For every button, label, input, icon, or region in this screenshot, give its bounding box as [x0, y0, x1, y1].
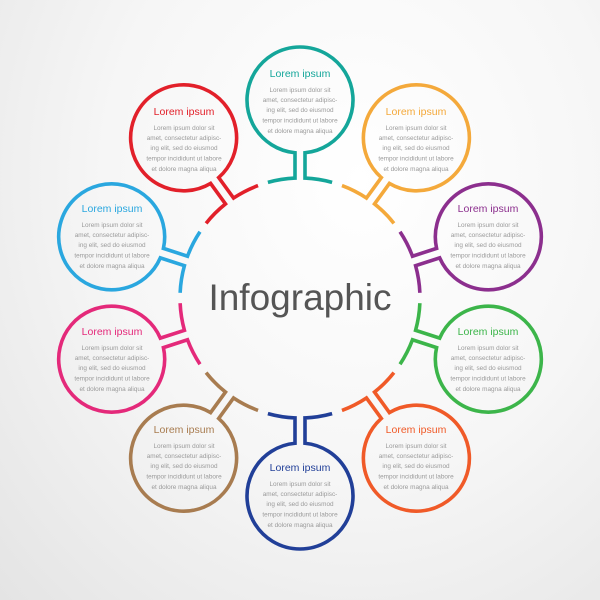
item: green: Lorem ipsum dolor sit	[457, 345, 519, 352]
item: red: Lorem ipsum	[154, 106, 215, 118]
item: blue: tempor incididunt ut labore	[74, 252, 150, 260]
item: green: tempor incididunt ut labore	[450, 376, 526, 382]
item: orange-red: et dolore magna aliqua	[383, 484, 449, 491]
item: green: ing elit, sed do eiusmod	[454, 365, 522, 372]
item: red: Lorem ipsum dolor sit	[153, 125, 215, 132]
item: orange: ing elit, sed do eiusmod	[382, 145, 450, 152]
item: brown: ing elit, sed do eiusmod	[150, 463, 218, 470]
item: blue: ing elit, sed do eiusmod	[78, 242, 146, 249]
item: orange-red	[325, 360, 490, 532]
item: purple: Lorem ipsum dolor sit	[457, 222, 519, 229]
item: blue: Lorem ipsum dolor sit	[81, 222, 143, 229]
item: brown: tempor incididunt ut labore	[146, 474, 222, 480]
item: orange-red: Lorem ipsum dolor sit	[385, 443, 447, 450]
item: red: et dolore magna aliqua	[151, 166, 217, 173]
item: blue: Lorem ipsum	[82, 203, 143, 215]
item: purple: amet, consectetur adipisc-	[451, 232, 525, 239]
item: blue: amet, consectetur adipisc-	[75, 232, 149, 239]
item: teal	[247, 47, 353, 182]
item: navy: ing elit, sed do eiusmod	[266, 501, 334, 508]
item: orange-red: tempor incididunt ut labore	[378, 474, 454, 480]
item: orange: Lorem ipsum	[386, 106, 447, 118]
item: red: tempor incididunt ut labore	[146, 156, 222, 162]
item: green: Lorem ipsum	[458, 326, 519, 338]
title: Infographic	[208, 277, 392, 318]
item: teal: ing elit, sed do eiusmod	[266, 107, 334, 114]
item: green	[394, 283, 555, 426]
item: navy	[247, 414, 353, 549]
item: pink: amet, consectetur adipisc-	[75, 355, 149, 362]
item: teal: tempor incididunt ut labore	[262, 118, 338, 124]
item: pink: tempor incididunt ut labore	[74, 376, 150, 382]
item: purple	[394, 170, 555, 313]
item: pink: Lorem ipsum	[82, 326, 143, 338]
item: purple: tempor incididunt ut labore	[450, 252, 526, 260]
item: purple: Lorem ipsum	[458, 203, 519, 215]
item: navy: Lorem ipsum dolor sit	[269, 481, 331, 488]
item: teal: et dolore magna aliqua	[267, 128, 333, 135]
item: navy: tempor incididunt ut labore	[262, 512, 338, 518]
item: purple: et dolore magna aliqua	[455, 263, 521, 270]
item: blue: et dolore magna aliqua	[79, 263, 145, 270]
item: green: et dolore magna aliqua	[455, 386, 521, 393]
item: orange: amet, consectetur adipisc-	[379, 135, 453, 142]
item: orange-red: amet, consectetur adipisc-	[379, 453, 453, 460]
item: green: amet, consectetur adipisc-	[451, 355, 525, 362]
item: teal: Lorem ipsum	[270, 68, 331, 80]
item: brown: Lorem ipsum	[154, 424, 215, 436]
item: orange: Lorem ipsum dolor sit	[385, 125, 447, 132]
item: pink: ing elit, sed do eiusmod	[78, 365, 146, 372]
item: pink: Lorem ipsum dolor sit	[81, 345, 143, 352]
item: red: amet, consectetur adipisc-	[147, 135, 221, 142]
item: pink: et dolore magna aliqua	[79, 386, 145, 393]
item: teal: amet, consectetur adipisc-	[263, 97, 337, 104]
item: orange: et dolore magna aliqua	[383, 166, 449, 173]
item: red: ing elit, sed do eiusmod	[150, 145, 218, 152]
item: orange-red: Lorem ipsum	[386, 424, 447, 436]
item: teal: Lorem ipsum dolor sit	[269, 87, 331, 94]
item: brown: Lorem ipsum dolor sit	[153, 443, 215, 450]
item: blue	[45, 170, 206, 313]
item: brown: amet, consectetur adipisc-	[147, 453, 221, 460]
item: brown: et dolore magna aliqua	[151, 484, 217, 491]
item: pink	[45, 283, 206, 426]
item: red	[110, 64, 275, 236]
item: purple: ing elit, sed do eiusmod	[454, 242, 522, 249]
item: orange	[325, 64, 490, 236]
item: brown	[110, 360, 275, 532]
item: navy: Lorem ipsum	[270, 462, 331, 474]
item: navy: amet, consectetur adipisc-	[263, 491, 337, 498]
item: orange-red: ing elit, sed do eiusmod	[382, 463, 450, 470]
item: orange: tempor incididunt ut labore	[378, 156, 454, 162]
item: navy: et dolore magna aliqua	[267, 522, 333, 529]
